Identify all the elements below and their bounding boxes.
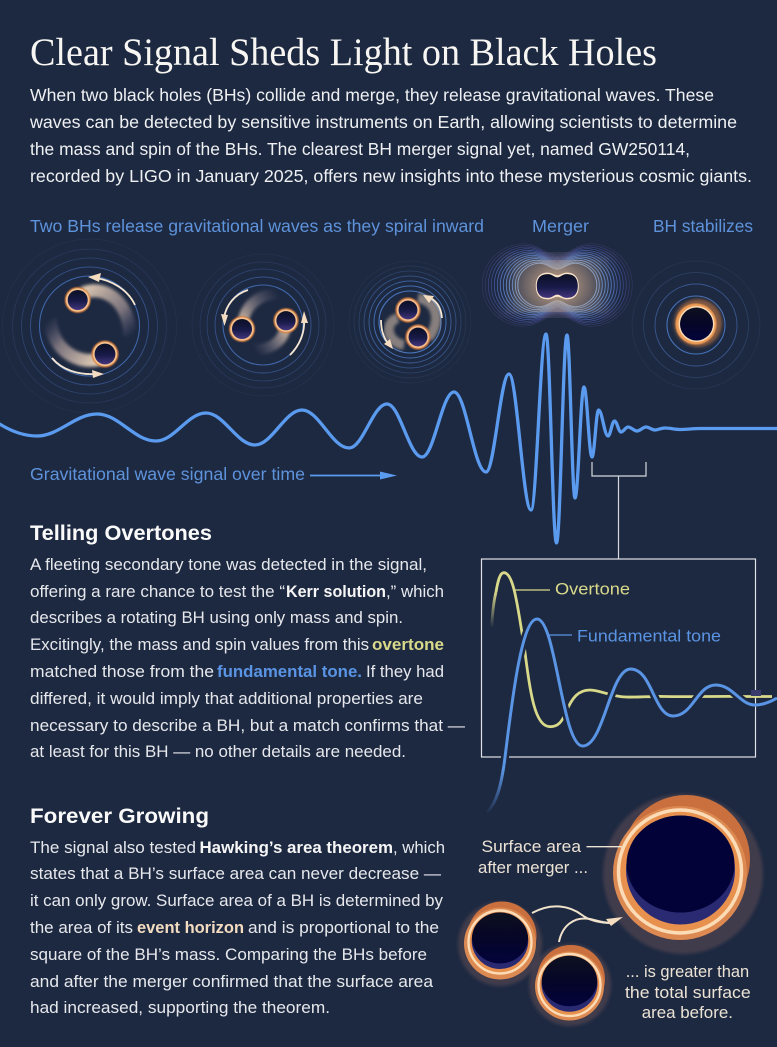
body text: Hawking’s area theorem xyxy=(200,838,393,857)
body text: square of the BH’s mass. Comparing the BHs before xyxy=(30,945,427,964)
body text: overtone xyxy=(372,635,444,654)
stage labels: Merger xyxy=(532,216,589,236)
heading: Telling Overtones xyxy=(30,522,212,545)
illustration: merger xyxy=(482,244,632,326)
surface area after label: after merger ... xyxy=(478,858,588,877)
wave signal label with arrow: Gravitational wave signal over time xyxy=(30,464,305,484)
body text: fundamental tone. xyxy=(217,662,362,681)
intro paragraph: the mass and spin of the BHs. The clearest BH merger signal yet, named GW250114, xyxy=(30,139,690,159)
heading: Forever Growing xyxy=(30,805,209,828)
body text: describes a rotating BH using only mass and spin. xyxy=(30,608,403,627)
illustration: black holes spiralling, wide orbit xyxy=(2,239,176,413)
body text: necessary to describe a BH, but a match confirms that — xyxy=(30,716,465,735)
body text: at least for this BH — no other details are needed. xyxy=(30,742,406,761)
large black hole after merger xyxy=(603,794,763,954)
illustration: black holes spiralling, tight orbit xyxy=(349,261,471,383)
body text: the area of its xyxy=(30,918,133,937)
bracket connecting signal to detail xyxy=(592,462,646,559)
section: Telling Overtones xyxy=(30,522,465,761)
body text: and after the merger confirmed that the surface area xyxy=(30,972,434,991)
merging arrows xyxy=(532,906,623,942)
illustration: stabilized black hole xyxy=(632,261,760,389)
section: Forever Growing xyxy=(30,805,445,1017)
body text: Excitingly, the mass and spin values from this xyxy=(30,635,369,654)
surface area before label: area before. xyxy=(642,1003,733,1022)
body text: Kerr solution xyxy=(286,582,386,601)
stage labels: BH stabilizes xyxy=(653,216,753,236)
illustration: black holes spiralling, medium orbit xyxy=(192,254,334,396)
body text xyxy=(30,838,445,1017)
body text: and is proportional to the xyxy=(248,918,439,937)
surface area before label: the total surface xyxy=(625,983,751,1002)
overtone label xyxy=(514,580,630,598)
surface area before label xyxy=(625,962,751,1022)
small black hole before merger, left xyxy=(458,902,542,986)
intro paragraph: recorded by LIGO in January 2025, offers new insights into these mysterious cosmic giants. xyxy=(30,166,752,186)
body text: it can only grow. Surface area of a BH is determined by xyxy=(30,891,443,910)
stage labels: Two BHs release gravitational waves as they spiral inward xyxy=(30,216,484,236)
title: Clear Signal Sheds Light on Black Holes xyxy=(30,31,657,74)
body text: states that a BH’s surface area can never decrease — xyxy=(30,864,441,883)
surface area after label: Surface area xyxy=(482,837,582,856)
fundamental tone label: Fundamental tone xyxy=(577,627,721,646)
stage labels xyxy=(30,216,753,236)
body text: matched those from the xyxy=(30,662,214,681)
body text: had increased, supporting the theorem. xyxy=(30,998,330,1017)
body text: If they had xyxy=(366,662,444,681)
intro paragraph: waves can be detected by sensitive instruments on Earth, allowing scientists to determine xyxy=(29,112,737,132)
body text: , which xyxy=(393,838,445,857)
overtone detail chart xyxy=(482,559,777,813)
intro paragraph: When two black holes (BHs) collide and merge, they release gravitational waves. These xyxy=(30,85,714,105)
surface area after label xyxy=(478,837,622,877)
body text: A fleeting secondary tone was detected in the signal, xyxy=(30,555,427,574)
gravitational wave signal xyxy=(0,334,777,543)
body text: offering a rare chance to test the “ xyxy=(30,582,285,601)
small black hole before merger, right xyxy=(529,944,611,1026)
body text: ,” which xyxy=(386,582,444,601)
body text: The signal also tested xyxy=(30,838,196,857)
body text xyxy=(30,555,465,761)
overtone label: Overtone xyxy=(555,580,630,598)
intro paragraph xyxy=(29,85,752,186)
surface area before label: ... is greater than xyxy=(626,962,749,981)
body text: event horizon xyxy=(137,918,244,937)
body text: differed, it would imply that additional properties are xyxy=(30,689,423,708)
